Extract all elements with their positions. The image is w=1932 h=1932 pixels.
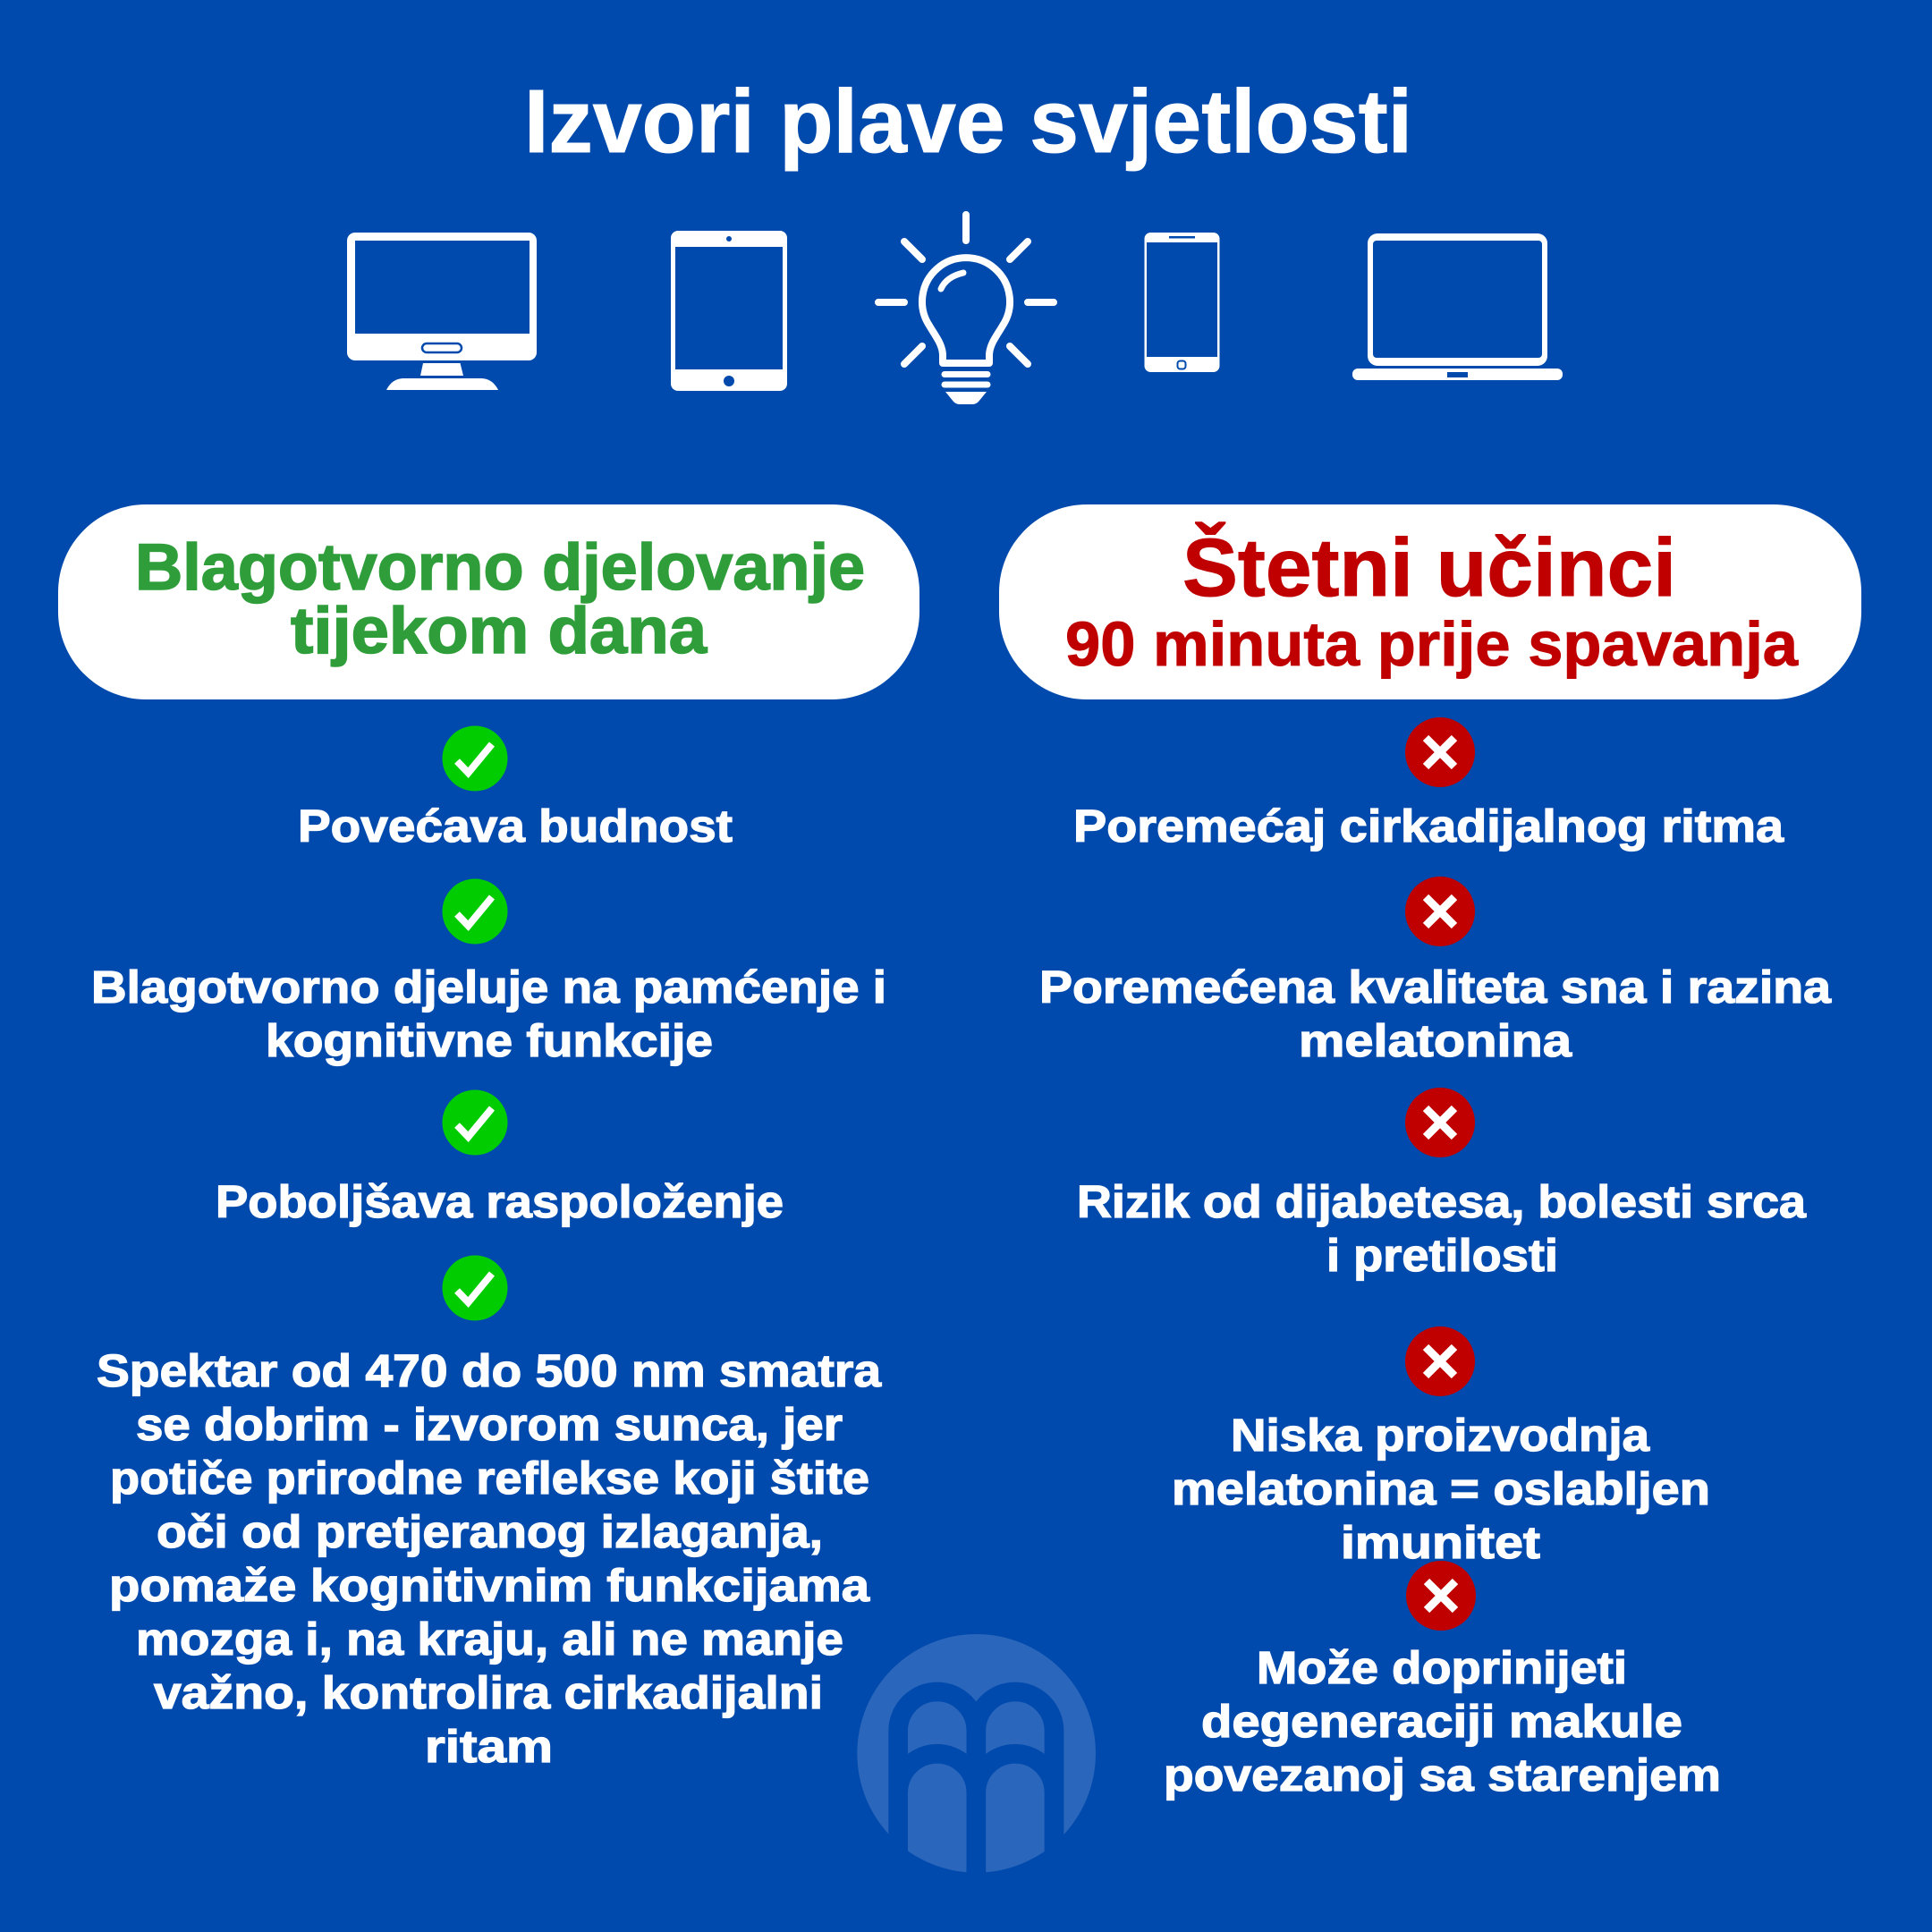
benefit: spectrum description: potiče prirodne reflekse koji štite xyxy=(110,1453,869,1504)
benefit: spectrum description: mozga i, na kraju, ali ne manje xyxy=(136,1614,843,1665)
benefit: spectrum description: Spektar od 470 do 500 nm smatra xyxy=(97,1345,882,1396)
benefit: spectrum description xyxy=(97,1345,882,1772)
harm: sleep quality xyxy=(1039,962,1832,1066)
panel: harmful effects list xyxy=(1039,717,1832,1801)
panel: benefits header: Blagotvorno djelovanje xyxy=(135,531,865,604)
harm: weakened immunity xyxy=(1172,1410,1710,1568)
icon: cross 4 xyxy=(1405,1326,1475,1396)
harm: diabetes and heart disease: i pretilosti xyxy=(1326,1230,1558,1281)
benefit: spectrum description: važno, kontrolira cirkadijalni xyxy=(154,1667,823,1718)
icon: smartphone xyxy=(1145,233,1220,372)
panel: benefits list xyxy=(91,726,886,1772)
icon row: light sources xyxy=(347,215,1563,404)
icon: cross 1 xyxy=(1405,717,1475,787)
benefit: spectrum description: oči od pretjeranog izlaganja, xyxy=(157,1506,823,1557)
benefit: memory and cognition xyxy=(91,962,886,1066)
harm: sleep quality: melatonina xyxy=(1299,1015,1572,1066)
icon: laptop xyxy=(1352,233,1563,380)
harm: macular degeneration xyxy=(1164,1642,1721,1801)
watermark logo xyxy=(857,1634,1096,1896)
panel: harmful effects header: Štetni učinci xyxy=(1182,521,1676,614)
benefit: memory and cognition: kognitivne funkcije xyxy=(266,1015,713,1066)
benefit: spectrum description: pomaže kognitivnim funkcijama xyxy=(109,1560,870,1611)
panel: harmful effects header: 90 minuta prije spavanja xyxy=(1065,609,1799,679)
icon: check 4 xyxy=(442,1256,508,1320)
icon: check 1 xyxy=(442,726,508,791)
panel: benefits header xyxy=(58,504,919,699)
icon: cross 5 xyxy=(1406,1561,1476,1631)
benefit: spectrum description: se dobrim - izvorom sunca, jer xyxy=(136,1399,843,1450)
harm: diabetes and heart disease: Rizik od dijabetesa, bolesti srca xyxy=(1077,1176,1807,1227)
panel: harmful effects header xyxy=(999,504,1861,699)
harm: macular degeneration: povezanoj sa starenjem xyxy=(1164,1750,1721,1801)
icon: cross 2 xyxy=(1405,877,1475,946)
icon: check 3 xyxy=(442,1089,508,1156)
icon: desktop monitor xyxy=(347,233,537,390)
icon: check 2 xyxy=(442,878,508,945)
icon: cross 3 xyxy=(1405,1088,1475,1157)
harm: weakened immunity: Niska proizvodnja xyxy=(1231,1410,1650,1461)
icon: tablet xyxy=(671,231,787,391)
benefit: alertness: Povećava budnost xyxy=(298,801,733,852)
benefit: mood: Poboljšava raspoloženje xyxy=(216,1176,784,1227)
harm: weakened immunity: melatonina = oslabljen xyxy=(1172,1463,1710,1514)
title: Izvori plave svjetlosti xyxy=(524,72,1412,172)
harm: circadian rhythm: Poremećaj cirkadijalnog ritma xyxy=(1073,801,1784,852)
benefit: memory and cognition: Blagotvorno djeluje na pamćenje i xyxy=(91,962,886,1013)
panel: benefits header: tijekom dana xyxy=(291,595,708,667)
harm: macular degeneration: degeneraciji makule xyxy=(1201,1696,1682,1747)
icon: light bulb xyxy=(878,215,1054,404)
harm: sleep quality: Poremećena kvaliteta sna i razina xyxy=(1039,962,1832,1013)
benefit: spectrum description: ritam xyxy=(425,1721,553,1772)
harm: diabetes and heart disease xyxy=(1077,1176,1807,1281)
harm: macular degeneration: Može doprinijeti xyxy=(1257,1642,1627,1693)
harm: weakened immunity: imunitet xyxy=(1341,1517,1540,1568)
